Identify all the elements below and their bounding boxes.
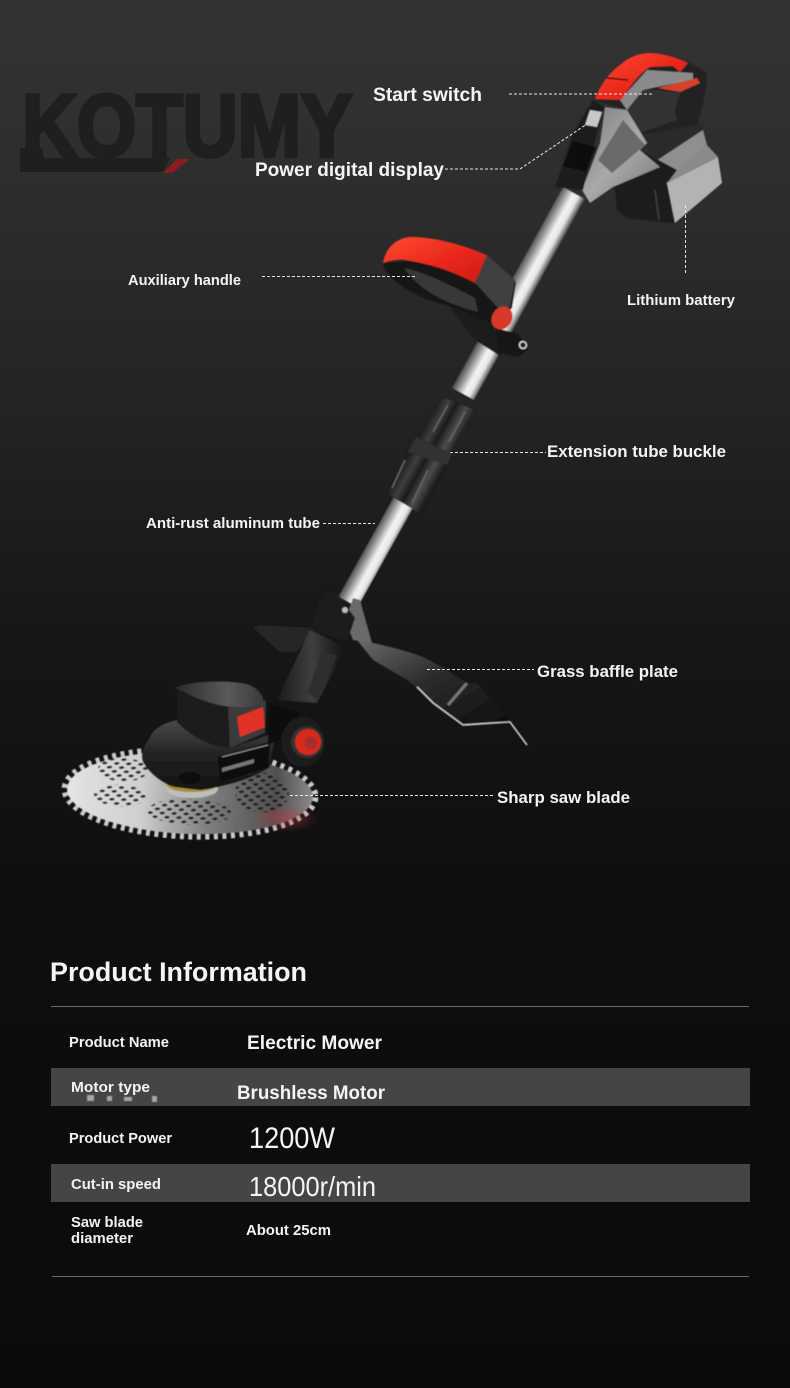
callout: power digital display: Power digital display bbox=[255, 159, 444, 181]
heading: product information: Product Information bbox=[50, 957, 307, 987]
row: product name: Product Name bbox=[69, 1035, 169, 1051]
main body and start handle bbox=[555, 53, 707, 203]
callout leader lines bbox=[262, 94, 686, 796]
callout: start switch: Start switch bbox=[373, 84, 482, 106]
blade hole clusters bbox=[93, 757, 290, 828]
callout: lithium battery: Lithium battery bbox=[627, 293, 735, 309]
row: motor type bbox=[71, 1080, 386, 1104]
callout: grass baffle plate: Grass baffle plate bbox=[537, 662, 678, 681]
row: product name bbox=[69, 1033, 383, 1054]
callout: auxiliary handle: Auxiliary handle bbox=[128, 273, 241, 289]
aluminum tube bbox=[348, 193, 574, 602]
callout: extension tube buckle: Extension tube buckle bbox=[547, 442, 726, 461]
motor head bbox=[142, 682, 325, 798]
row: saw blade diameter: Saw blade bbox=[71, 1215, 143, 1231]
red handle grip bbox=[595, 53, 688, 100]
saw blade bbox=[64, 746, 321, 841]
row: motor type: Motor type bbox=[71, 1080, 150, 1096]
row: cut-in speed: 18000r/min bbox=[249, 1171, 376, 1202]
watermark logo: KOTUMY: KOTUMY bbox=[22, 76, 352, 175]
row: product power bbox=[69, 1122, 336, 1155]
row: product power: 1200W bbox=[249, 1122, 336, 1155]
auxiliary handle bbox=[383, 237, 529, 357]
row: saw blade diameter bbox=[71, 1215, 331, 1247]
handle opening bbox=[627, 90, 680, 133]
product illustration: electric mower bbox=[64, 53, 722, 841]
shaft housing and bracket bbox=[277, 590, 372, 703]
product information table bbox=[51, 1006, 750, 1276]
callout: anti-rust aluminum tube: Anti-rust aluminum tube bbox=[146, 516, 320, 532]
red knob bbox=[281, 717, 325, 767]
row: motor type: Brushless Motor bbox=[237, 1083, 386, 1104]
extension tube buckle bbox=[387, 397, 475, 515]
battery pack bbox=[615, 123, 722, 223]
row: saw blade diameter: diameter bbox=[71, 1231, 133, 1247]
row: product power: Product Power bbox=[69, 1131, 172, 1147]
callout: sharp saw blade: Sharp saw blade bbox=[497, 788, 630, 807]
row: product name: Electric Mower bbox=[247, 1033, 383, 1054]
row: cut-in speed bbox=[71, 1171, 376, 1202]
grass baffle plate bbox=[253, 625, 527, 745]
row: saw blade diameter: About 25cm bbox=[246, 1223, 331, 1239]
row: cut-in speed: Cut-in speed bbox=[71, 1177, 161, 1193]
